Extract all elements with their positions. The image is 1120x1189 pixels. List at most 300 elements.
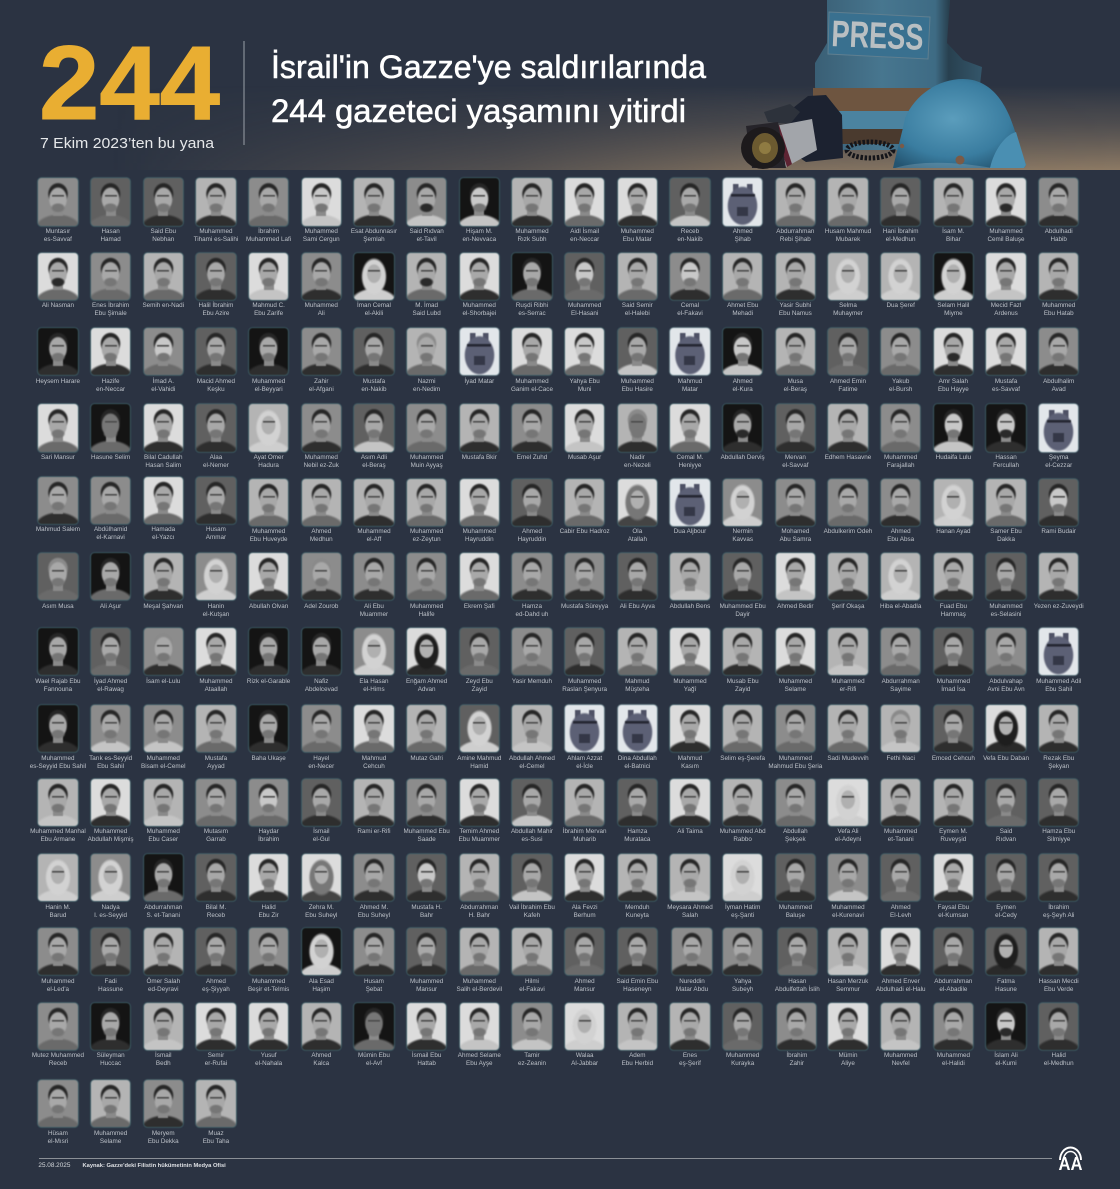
helmet: [893, 79, 1026, 168]
card: Receb en-Nakib: [668, 176, 712, 243]
camera: [741, 95, 843, 169]
card: Muhammed Mahmud Ebu Şeria: Mahmud Ebu Şeria: [768, 763, 822, 770]
card: Mahmud Matar: [664, 328, 716, 396]
card: Muhammed es-Selasini: [980, 553, 1032, 621]
card: Husam Mahmud Mubarek: [825, 176, 871, 243]
card: Ali Ebu Muammer: Ali Ebu: [364, 602, 384, 610]
card: Vail İbrahim Ebu Kafeh: Vail İbrahim Ebu: [509, 904, 555, 910]
card: Abdulhadi Habib: [1038, 176, 1080, 243]
card: Ahmed Hayruddin: Hayruddin: [518, 536, 546, 543]
card: Abdullah Şekşek: Abdullah: [783, 828, 808, 835]
card: Eymen el-Cedy: [980, 854, 1032, 922]
card: Vail İbrahim Ebu Kafeh: [506, 854, 558, 922]
card: Mutasım Garrab: Garrab: [206, 836, 226, 843]
card: İsmail Bedh: Bedh: [156, 1060, 171, 1067]
card: Yahya Subeyh: [716, 928, 769, 996]
card: Muhammed et-Tanani: et-Tanani: [888, 836, 914, 843]
card: Rami er-Rifi: Rami er-Rifi: [357, 828, 391, 835]
card: Ala Fevzi Berhum: [558, 854, 611, 922]
card: Hüsam el-Mısri: Hüsam: [48, 1130, 68, 1136]
card: Selim eş-Şerefa: Selim eş-Şerefa: [720, 755, 765, 762]
card: Muhammed Ebu Hatab: [1032, 253, 1085, 321]
card: Haydar İbrahim: İbrahim: [258, 836, 279, 843]
card: Fuad Ebu Hammaş: Hammaş: [941, 611, 966, 618]
card: Mutez Muhammed Receb: [32, 1003, 84, 1071]
card: Haydar İbrahim: [242, 779, 295, 847]
card: Şerif Okaşa: [822, 553, 874, 621]
card: Enes eş-Şerif: eş-Şerif: [679, 1060, 701, 1067]
card: Abdulhadi Habib: Habib: [1050, 236, 1067, 243]
card: Hasan Hamad: Hamad: [100, 236, 121, 243]
card: Hamza ed-Dahd uh: Hamza: [522, 602, 542, 610]
card: İsmail Ebu Hattab: [400, 1003, 453, 1071]
card: Mutez Muhammed Receb: Mutez Muhammed: [32, 1052, 84, 1059]
card: Mustafa es-Savvaf: [980, 328, 1032, 396]
card: Dua Şeref: [880, 252, 922, 309]
card: Muhammed Bisam el-Cemel: Bisam el-Cemel: [141, 763, 186, 770]
card: Ali Ebu Muammer: Muammer: [360, 611, 388, 618]
card: Mahmud Müşteha: Mahmud: [625, 678, 650, 684]
card: Hamza Murataca: Hamza: [627, 828, 647, 835]
card: Muhammed Salih el-Berdevil: [453, 928, 506, 996]
card: Hasan Abdulfettah İslih: Hasan: [788, 978, 806, 984]
card: Husam Şebat: Şebat: [366, 986, 382, 993]
card: Said Rıdvan: [980, 779, 1032, 847]
card: Eymen M. Ruveyşid: Eymen M.: [939, 828, 968, 835]
card: Meysara Ahmed Salah: Meysara Ahmed: [667, 904, 713, 910]
card: Baha Ukaşe: [242, 705, 295, 773]
card: Ali Nasman: Ali Nasman: [42, 302, 74, 309]
portraits row 9: [32, 779, 1085, 847]
card: Muhammed İmad İsa: Muhammed: [937, 678, 970, 684]
card: Adem Ebu Herbid: Adem: [629, 1052, 646, 1059]
card: Muhammed Mansur: [400, 928, 453, 996]
card: Nafiz Abdelcevad: Nafiz: [314, 678, 328, 684]
card: Tamir ez-Zeanin: [506, 1003, 558, 1071]
card: Hasan Merzuk Semmur: Semmur: [836, 986, 860, 993]
card: Abdullah Şekşek: Şekşek: [785, 836, 806, 843]
card: Tamir ez-Zeanin: ez-Zeanin: [518, 1060, 546, 1067]
card: Cemal M. Heniyye: Cemal M.: [677, 454, 703, 461]
card: Muhammed Beşir et-Telmis: Beşir et-Telmis: [248, 986, 289, 993]
card: Ala Fevzi Berhum: Berhum: [574, 912, 596, 919]
card: Semir er-Rufai: [190, 1003, 242, 1071]
card: İbrahim Muhammed Lafi: Muhammed Lafi: [246, 236, 291, 243]
card: Ahmed M. Ebu Suheyl: Ahmed M.: [360, 904, 388, 910]
card: Muhammed Selame: [769, 628, 822, 696]
icon: AA agency logo: [1057, 1146, 1083, 1172]
card: Selam Halil Miyme: [932, 252, 974, 317]
card: Ola Atallah: Ola: [632, 528, 642, 535]
card: Muhammed Abd Rabbo: [716, 779, 769, 847]
card: Amine Mahmud Hamid: Hamid: [470, 763, 488, 770]
card: Mahmud Matar: Matar: [682, 386, 698, 393]
card: Said Ebu Nebhan: Nebhan: [152, 236, 174, 243]
card: Muhammed Ebu Matar: Ebu Matar: [623, 236, 652, 243]
card: Yusuf el-Nahala: Yusuf: [261, 1052, 276, 1059]
card: Muhammed Abdullah Mişmiş: Abdullah Mişmiş: [88, 836, 134, 843]
card: Ayat Omer Hadura: Hadura: [258, 462, 279, 469]
card: Zahir el-Afgani: [295, 328, 348, 396]
card: Muhammed el-Led'a: Muhammed: [41, 978, 75, 984]
card: Selim eş-Şerefa: [716, 705, 769, 773]
card: Muhammed Nevfel: [874, 1003, 927, 1071]
card: Ahmed Ebu Absa: Ebu Absa: [887, 536, 914, 543]
portraits row 6: [32, 553, 1085, 621]
card: Alaa el-Nemer: [190, 404, 242, 472]
card: Ahmed Emin Fatime: [822, 328, 874, 396]
card: Abdullah Derviş: [716, 404, 769, 472]
card: Mustafa Bkir: Mustafa Bkir: [462, 454, 497, 461]
card: Muhammed Ebu Matar: [616, 176, 658, 243]
card: Muhammed Mansur: Muhammed: [410, 978, 443, 984]
card: Zahir el-Afgani: el-Afgani: [309, 386, 334, 393]
card: Tamir ez-Zeanin: Tamir: [524, 1052, 540, 1059]
card: Ömer Salah ed-Deyravi: ed-Deyravi: [148, 986, 178, 993]
card: Hanin el-Kutşan: el-Kutşan: [203, 611, 229, 618]
card: Tarık es-Seyyid Ebu Sahil: Ebu Sahil: [97, 763, 124, 770]
card: Muhammed ez-Zeytun: ez-Zeytun: [413, 536, 441, 543]
card: Meşal Şahvan: Meşal Şahvan: [143, 602, 183, 610]
card: Hamza Ebu Silmiyye: [1032, 779, 1085, 847]
card: Muhammed Abd Rabbo: Muhammed Abd: [720, 828, 766, 835]
card: İmad A. el-Vahidi: [137, 328, 190, 396]
card: Muhammed Ganim el-Cace: [506, 328, 558, 396]
card: Muhammed es-Seyyid Ebu Sahil: es-Seyyid Ebu Sahil: [30, 763, 86, 770]
card: Esat Abdunnasır Şemlah: Şemlah: [363, 236, 385, 243]
card: Muhammed Nebil ez-Zuk: Muhammed: [305, 454, 338, 461]
card: Muhammed el-Shorbajei: Muhammed: [463, 302, 496, 309]
card: İyman Hatim eş-Şanti: İyman Hatim: [725, 904, 760, 910]
card: İbrahim eş-Şeyh Ali: eş-Şeyh Ali: [1043, 912, 1074, 919]
card: Nazmi en-Nedim: en-Nedim: [413, 386, 440, 393]
card: Muhammed el-Led'a: el-Led'a: [47, 986, 69, 993]
card: Hanin M. Barud: [32, 854, 84, 922]
card: İbrahim Zahir: İbrahim: [786, 1052, 807, 1059]
card: İmad A. el-Vahidi: İmad A.: [153, 378, 174, 384]
card: Muhammed Ebu Hasire: Muhammed: [621, 378, 654, 384]
card: Fadi Hassune: [84, 928, 137, 996]
card: Hasune Selim: [84, 404, 137, 472]
card: Enes İbrahim Ebu Şimale: [90, 252, 132, 317]
card: Asım Adli el-Beraş: [348, 404, 400, 472]
card: Hassan Mecdi Ebu Verde: Ebu Verde: [1044, 986, 1073, 993]
title line 1: İsrail'in Gazze'ye saldırılarında: [271, 49, 706, 85]
card: Abdullah Mahir es-Susi: es-Susi: [521, 836, 542, 843]
card: Temim Ahmed Ebu Muammer: Ebu Muammer: [459, 836, 500, 843]
card: Ahmed El-Levh: [874, 854, 927, 922]
card: Muhammed Abd Rabbo: Rabbo: [733, 836, 752, 843]
card: Mahmud Salem: [32, 477, 84, 545]
card: Ahmed Medhun: [295, 479, 348, 547]
card: Husam Ammar: [190, 477, 242, 545]
card: M. İmad Said Lubd: M. İmad: [415, 302, 438, 309]
card: Meysara Ahmed Salah: [664, 854, 716, 922]
card: Cabir Ebu Hadroz: Cabir Ebu Hadroz: [560, 528, 610, 535]
card: Muhammed Baluşe: [769, 854, 822, 922]
card: Muhammed Ali: [300, 252, 342, 317]
card: Nermin Kavvas: [716, 479, 769, 547]
card: Muhammed Mahmud Ebu Şeria: Muhammed: [779, 755, 812, 762]
card: Ali Aşur: Ali Aşur: [100, 602, 121, 610]
card: Muhammed el-Kurenavi: Muhammed: [831, 904, 865, 910]
card: Yakub el-Bursh: [874, 328, 927, 396]
sandy ground: [196, 93, 1120, 170]
card: Muntasır es-Savvaf: es-Savvaf: [44, 236, 72, 243]
card: Mümin Aliye: [822, 1003, 874, 1071]
card: Muhammed el-Halidi: el-Halidi: [942, 1060, 965, 1067]
card: İsam M. Bihar: Bihar: [946, 236, 961, 243]
card: Ahmed M. Ebu Suheyl: Ebu Suheyl: [358, 912, 390, 919]
card: Abdulhalim Avad: [1032, 328, 1085, 396]
card: Mahmud Müşteha: Müşteha: [625, 686, 649, 693]
card: Heysem Harare: [32, 328, 84, 396]
card: Nadir en-Nezeli: Nadir: [630, 454, 645, 461]
card: Ala Esad Haşim: Ala Esad: [309, 978, 334, 984]
card: Ahmed Hayruddin: [506, 479, 558, 547]
card: Hamza Murataca: [611, 779, 664, 847]
card: Halid Ebu Zir: [242, 854, 295, 922]
card: Abdurrahman S. et-Tanani: Abdurrahman: [144, 904, 182, 910]
card: İyman Hatim eş-Şanti: [716, 854, 769, 922]
card: Receb en-Nakib: Receb: [681, 228, 699, 235]
card: Muhammed Selame: Muhammed: [94, 1130, 127, 1136]
card: Abdurrahman Rebi Şihab: Rebi Şihab: [780, 236, 811, 243]
card: Yezen ez-Zuveydi: [1032, 553, 1085, 621]
card: Hazife en-Neccar: [84, 328, 137, 396]
card: Ahmed Mansur: [558, 928, 611, 996]
card: Zeyd Ebu Zayid: [453, 628, 506, 696]
card: Vefa Ebu Daban: Vefa Ebu Daban: [983, 755, 1029, 762]
card: Hamza Murataca: Murataca: [624, 836, 650, 843]
card: Hüsam el-Mısri: [32, 1080, 84, 1148]
card: Muhammed Raslan Şenyura: Muhammed: [568, 678, 601, 684]
card: Abdullah Bens: [664, 553, 716, 621]
card: Halid el-Medhun: [1032, 1003, 1085, 1071]
card: Dua Aljbour: Dua Aljbour: [674, 528, 706, 535]
card: Ahmed Hayruddin: Ahmed: [522, 528, 542, 535]
card: Vefa Ali el-Adeyni: Vefa Ali: [838, 828, 859, 835]
card: İsmail el-Gul: el-Gul: [313, 836, 330, 843]
card: Ahmed El-Levh: El-Levh: [890, 912, 911, 919]
card: Muhammed Nevfel: Muhammed: [884, 1052, 917, 1059]
card: Muhammed Tihami es-Salihi: Tihami es-Salihi: [194, 236, 238, 243]
card: Hamada el-Yazcı: Hamada: [151, 526, 175, 533]
card: Muhammed Beşir et-Telmis: Muhammed: [252, 978, 285, 984]
card: Halil İbrahim Ebu Azire: Halil İbrahim: [198, 302, 233, 309]
card: Hamza ed-Dahd uh: [506, 553, 558, 621]
card: Mustafa es-Savvaf: es-Savvaf: [992, 386, 1020, 393]
card: Zeyd Ebu Zayid: Zeyd Ebu: [466, 678, 493, 684]
card: Nazmi en-Nedim: Nazmi: [418, 378, 436, 384]
card: Yasir Subhi Ebu Namus: [774, 252, 816, 317]
big number 244: 244: [39, 25, 220, 142]
card: Muhammed Salih el-Berdevil: Muhammed: [463, 978, 496, 984]
card: Muhammed Yağî: Yağî: [684, 686, 696, 693]
card: Ahmed M. Ebu Suheyl: [348, 854, 400, 922]
card: Ali Aşur: [84, 553, 137, 621]
card: Muhammed Bisam el-Cemel: [137, 705, 190, 773]
card: Nafiz Abdelcevad: Abdelcevad: [305, 686, 338, 693]
card: Ali Nasman: [36, 252, 80, 309]
card: İsam M. Bihar: İsam M.: [942, 228, 965, 235]
card: İbrahim Mervan Muharib: Muharib: [573, 836, 596, 843]
card: Zahir el-Afgani: Zahir: [314, 378, 328, 384]
card: Ahmed Kalca: [295, 1003, 348, 1071]
card: Mustafa Süreyya: Mustafa Süreyya: [561, 602, 608, 610]
card: Abdulhalim Avad: Avad: [1052, 386, 1066, 393]
card: Nureddin Matar Abdu: Matar Abdu: [676, 986, 708, 993]
card: Ahmet Ebu Mehadi: Mehadi: [732, 310, 753, 317]
card: Muhammed es-Selasini: Muhammed: [989, 602, 1023, 610]
card: Ela Hasan el-Hims: Ela Hasan: [359, 678, 388, 684]
card: Cabir Ebu Hadroz: [558, 479, 611, 547]
card: Haydar İbrahim: Haydar: [258, 828, 279, 835]
card: İbrahim Mervan Muharib: [558, 779, 611, 847]
card: Muhammed Muin Ayyaş: Muin Ayyaş: [411, 462, 443, 469]
card: Cemal el-Fakavi: [668, 252, 712, 317]
card: Amr Salah Ebu Hayye: Ebu Hayye: [938, 386, 969, 393]
card: Muhammed el-Halidi: [927, 1003, 980, 1071]
card: Muhammed Ataallah: Ataallah: [205, 686, 227, 693]
card: Hani İbrahim el-Medhun: Hani İbrahim: [883, 228, 919, 235]
card: Hilmi el-Fakavi: el-Fakavi: [519, 986, 545, 993]
card: Ahmed el-Kura: [716, 328, 769, 396]
card: İbrahim eş-Şeyh Ali: İbrahim: [1048, 904, 1069, 910]
card: Asım Adli el-Beraş: Asım Adli: [361, 454, 387, 461]
card: Muhammed Halife: [400, 553, 453, 621]
card: Semih en-Nadi: [142, 252, 184, 309]
card: Muhammed el-Shorbajei: el-Shorbajei: [462, 310, 496, 317]
card: Said Rıdvan et-Tavil: [406, 176, 448, 243]
card: Dua Şeref: Dua Şeref: [886, 302, 915, 309]
card: Mustafa en-Nakib: [348, 328, 400, 396]
title line 2: 244 gazeteci yaşamını yitirdi: [271, 93, 686, 129]
card: Hanan Ayad: [927, 479, 980, 547]
card: Muhammed Ebu Dayir: [716, 553, 769, 621]
card: Rizk el-Garable: Rizk el-Garable: [247, 678, 290, 684]
card: Yahya Ebu Muni: Muni: [578, 386, 591, 393]
card: Hasune Selim: Hasune Selim: [91, 454, 130, 461]
card: Husam Ammar: Ammar: [206, 534, 226, 541]
card: Ruşdi Ribhi es-Serrac: es-Serrac: [518, 310, 546, 317]
card: Halid el-Medhun: Halid: [1052, 1052, 1066, 1059]
card: Abdurrahman el-Abadile: [927, 928, 980, 996]
card: Hani İbrahim el-Medhun: [880, 176, 922, 243]
card: Muhammed Cemil Baluşe: [984, 176, 1028, 243]
card: Muhammed Mansur: Mansur: [416, 986, 437, 993]
card: Wael Rajab Ebu Fannouna: [32, 628, 84, 696]
card: Muhammed Rızk Subh: Muhammed: [515, 228, 549, 235]
card: Mustafa H. Bahr: [400, 854, 453, 922]
card: Muhammed es-Selasini: es-Selasini: [991, 611, 1021, 618]
card: Mahmud Kasım: Kasım: [681, 763, 699, 770]
card: Ahmed Bedir: [769, 553, 822, 621]
card: Ahmed eş-Şiyyah: [190, 928, 242, 996]
card: Muntasır es-Savvaf: Muntasır: [46, 228, 70, 235]
card: İslam Ali el-Kumi: İslam Ali: [994, 1052, 1018, 1059]
card: Aidl İsmail en-Neccar: [564, 176, 606, 243]
card: Abdulkerim Odeh: Abdulkerim Odeh: [824, 528, 872, 535]
card: Muhammed Farajallah: [874, 404, 927, 472]
card: Mervan el-Savvaf: [769, 404, 822, 472]
card: Ahmed Şihab: Şihab: [735, 236, 751, 243]
card: Said Rıdvan et-Tavil: Said Rıdvan: [409, 228, 444, 235]
card: Muhammed Selame: [84, 1080, 137, 1148]
card: Ali Ebu Ayva: [611, 553, 664, 621]
card: Vefa Ali el-Adeyni: [822, 779, 874, 847]
card: Muhammed el-Aff: el-Aff: [367, 536, 381, 543]
card: Bilal Cadullah Hasan Salim: [137, 404, 190, 472]
card: Hiba el-Abadla: Hiba el-Abadla: [880, 602, 921, 610]
card: Muhammed Ebu Hasire: Ebu Hasire: [622, 386, 653, 393]
card: Asım Musa: [32, 553, 84, 621]
card: Ahmed Medhun: Ahmed: [311, 528, 331, 535]
card: Muhammed Farajallah: Muhammed: [884, 454, 917, 461]
card: Yasir Memduh: [506, 628, 558, 696]
card: Mecid Fazl Ardenus: Mecid Fazl: [991, 302, 1021, 309]
card: Abdurrahman S. et-Tanani: [137, 854, 190, 922]
card: İyad Ahmed el-Rawag: [84, 628, 137, 696]
card: Muhammed El-Hasani: Muhammed: [568, 302, 601, 309]
card: Ahmed Enver Abdulhadi el-Halu: Abdulhadi el-Halu: [876, 986, 926, 993]
card: Ali Taima: Ali Taima: [677, 828, 703, 835]
card: Nadya I. es-Seyyid: Nadya: [102, 904, 120, 910]
card: İyad Matar: [453, 328, 506, 396]
card: İslam Ali el-Kumi: el-Kumi: [995, 1060, 1017, 1067]
card: Abdullah Bens: Abdullah Bens: [670, 602, 710, 610]
card: Husam Mahmud Mubarek: Mubarek: [836, 236, 860, 243]
card: Ahmed Ebu Absa: [874, 479, 927, 547]
card: Ekrem Şafi: [453, 553, 506, 621]
card: Ekrem Şafi: Ekrem Şafi: [464, 602, 495, 610]
card: Rizk el-Garable: [242, 628, 295, 696]
card: Samer Ebu Dakka: Dakka: [997, 536, 1015, 543]
card: Muhammed el-Halidi: Muhammed: [937, 1052, 970, 1059]
card: Musab Aşur: [558, 404, 611, 472]
portraits row 11: [32, 928, 1085, 996]
card: Ahmed Bedir: Ahmed Bedir: [777, 602, 814, 610]
card: Muhammed Ebu Matar: Muhammed: [621, 228, 654, 235]
portraits row 1: [36, 176, 1080, 243]
card: Ahmed el-Kura: el-Kura: [732, 386, 753, 393]
footer date: 25.08.2025: [38, 1162, 70, 1168]
card: Hassan Mecdi Ebu Verde: Hassan Mecdi: [1039, 978, 1079, 984]
card: Mecid Fazl Ardenus: Ardenus: [994, 310, 1018, 317]
card: Hayel en-Necer: en-Necer: [308, 763, 334, 770]
card: Bilal M. Receb: Bilal M.: [206, 904, 226, 910]
card: Abdülhamid el-Karnavi: Abdülhamid: [94, 526, 127, 533]
card: İsam el-Lulu: İsam el-Lulu: [146, 678, 180, 684]
portraits row 7: [32, 628, 1085, 696]
card: Hazife en-Neccar: en-Neccar: [96, 386, 125, 393]
card: Tarık es-Seyyid Ebu Sahil: [84, 705, 137, 773]
card: Muhammed ez-Zeytun: [400, 479, 453, 547]
card: Muhammed Ebu Huveyde: Muhammed: [252, 528, 285, 535]
portraits row 5: [32, 477, 1085, 547]
card: Vefa Ali el-Adeyni: el-Adeyni: [835, 836, 861, 843]
card: Meşal Şahvan: [137, 553, 190, 621]
card: Meysara Ahmed Salah: Salah: [682, 912, 698, 919]
card: Abdulvahap Avni Ebu Avn: Avni Ebu Avn: [987, 686, 1025, 693]
card: Muhammed Muin Ayyaş: [400, 404, 453, 472]
card: Halil İbrahim Ebu Azire: [194, 252, 238, 317]
card: Nadir en-Nezeli: en-Nezeli: [624, 462, 651, 469]
card: Mümin Aliye: Mümin: [839, 1052, 857, 1059]
card: Memduh Kuneyta: [611, 854, 664, 922]
card: Dua Aljbour: [664, 479, 716, 547]
card: Şerif Okaşa: Şerif Okaşa: [832, 602, 864, 610]
